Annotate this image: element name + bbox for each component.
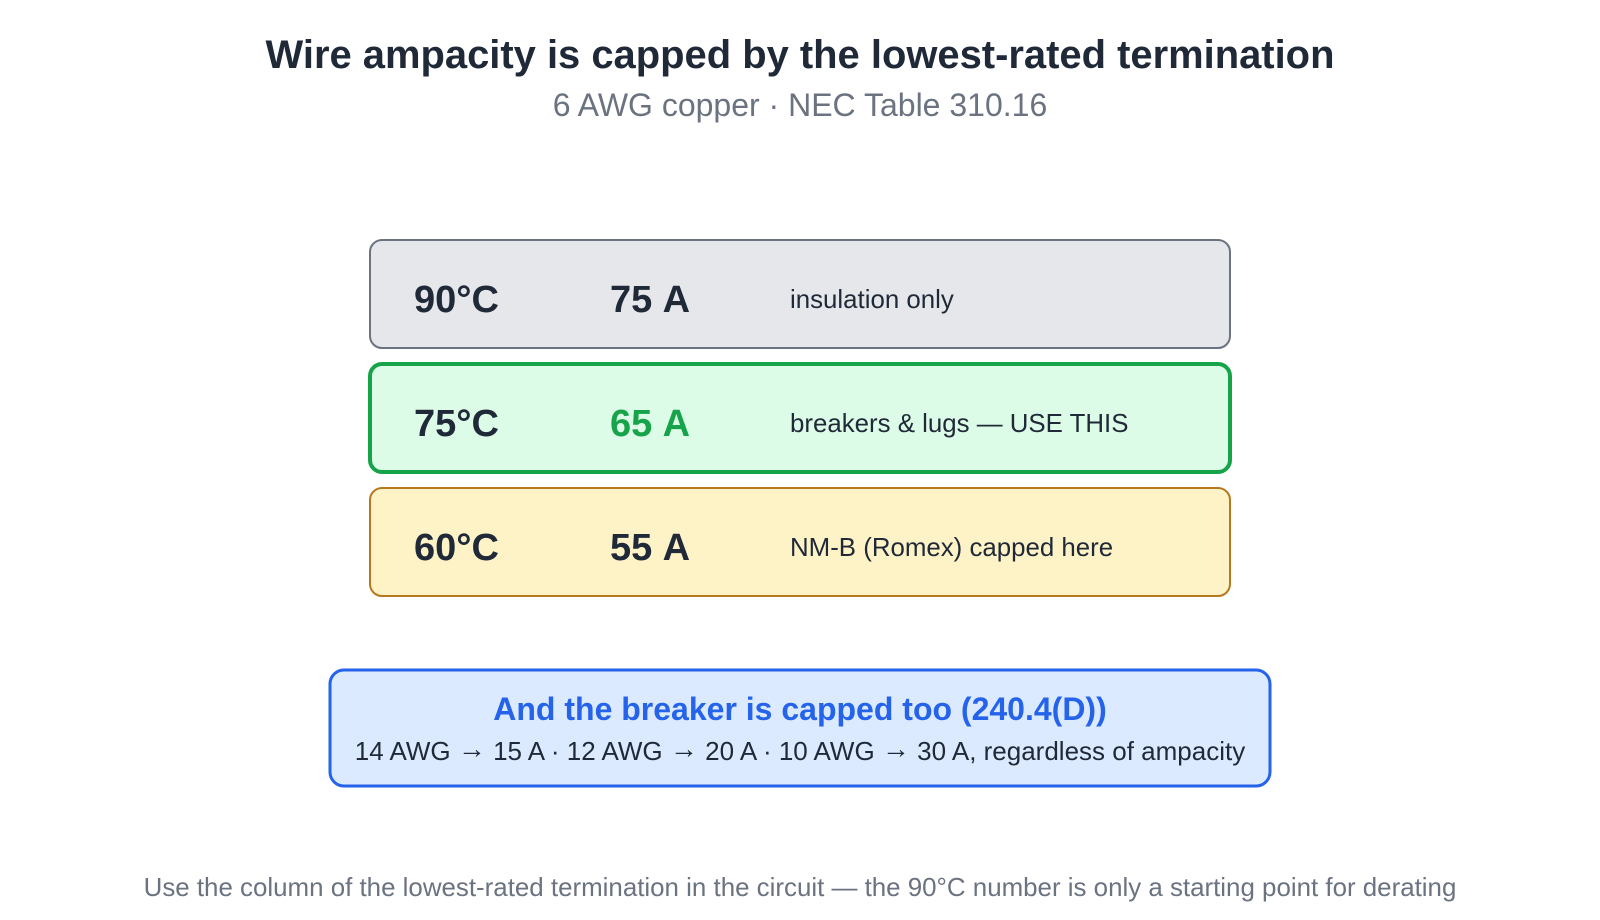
callout detail: 15 A · 12 AWG (486, 736, 670, 766)
panel: 75°C row (370, 364, 1230, 472)
subtitle: 6 AWG copper · NEC Table 310.16 (553, 87, 1047, 123)
note: insulation only: insulation only (790, 286, 954, 314)
note: breakers and lugs: breakers & lugs — USE THIS (790, 410, 1128, 438)
ampacity: 75 A: 75 A (610, 279, 690, 321)
callout detail: → (458, 733, 486, 764)
note: NM-B capped: NM-B (Romex) capped here (790, 534, 1113, 562)
ampacity: 65 A: 65 A (610, 403, 690, 445)
title: Wire ampacity is capped by the lowest-rated termination (266, 33, 1334, 77)
callout: breaker cap (330, 670, 1270, 786)
ampacity: 55 A: 55 A (610, 527, 690, 569)
temperature: 60°C: 60°C (414, 527, 499, 569)
callout detail: 14 AWG (355, 736, 451, 766)
callout detail: 30 A, regardless of ampacity (910, 736, 1245, 766)
callout detail: 20 A · 10 AWG (698, 736, 882, 766)
callout detail: → (670, 733, 698, 764)
panel: 60°C row (370, 488, 1230, 596)
callout heading: And the breaker is capped too (240.4(D)) (493, 691, 1107, 727)
temperature: 75°C: 75°C (414, 403, 499, 445)
callout detail: → (882, 733, 910, 764)
panel: 90°C row (370, 240, 1230, 348)
footer note: Use the column of the lowest-rated termination in the circuit — the 90°C number is only a starting point for derating (144, 874, 1456, 902)
temperature: 90°C: 90°C (414, 279, 499, 321)
